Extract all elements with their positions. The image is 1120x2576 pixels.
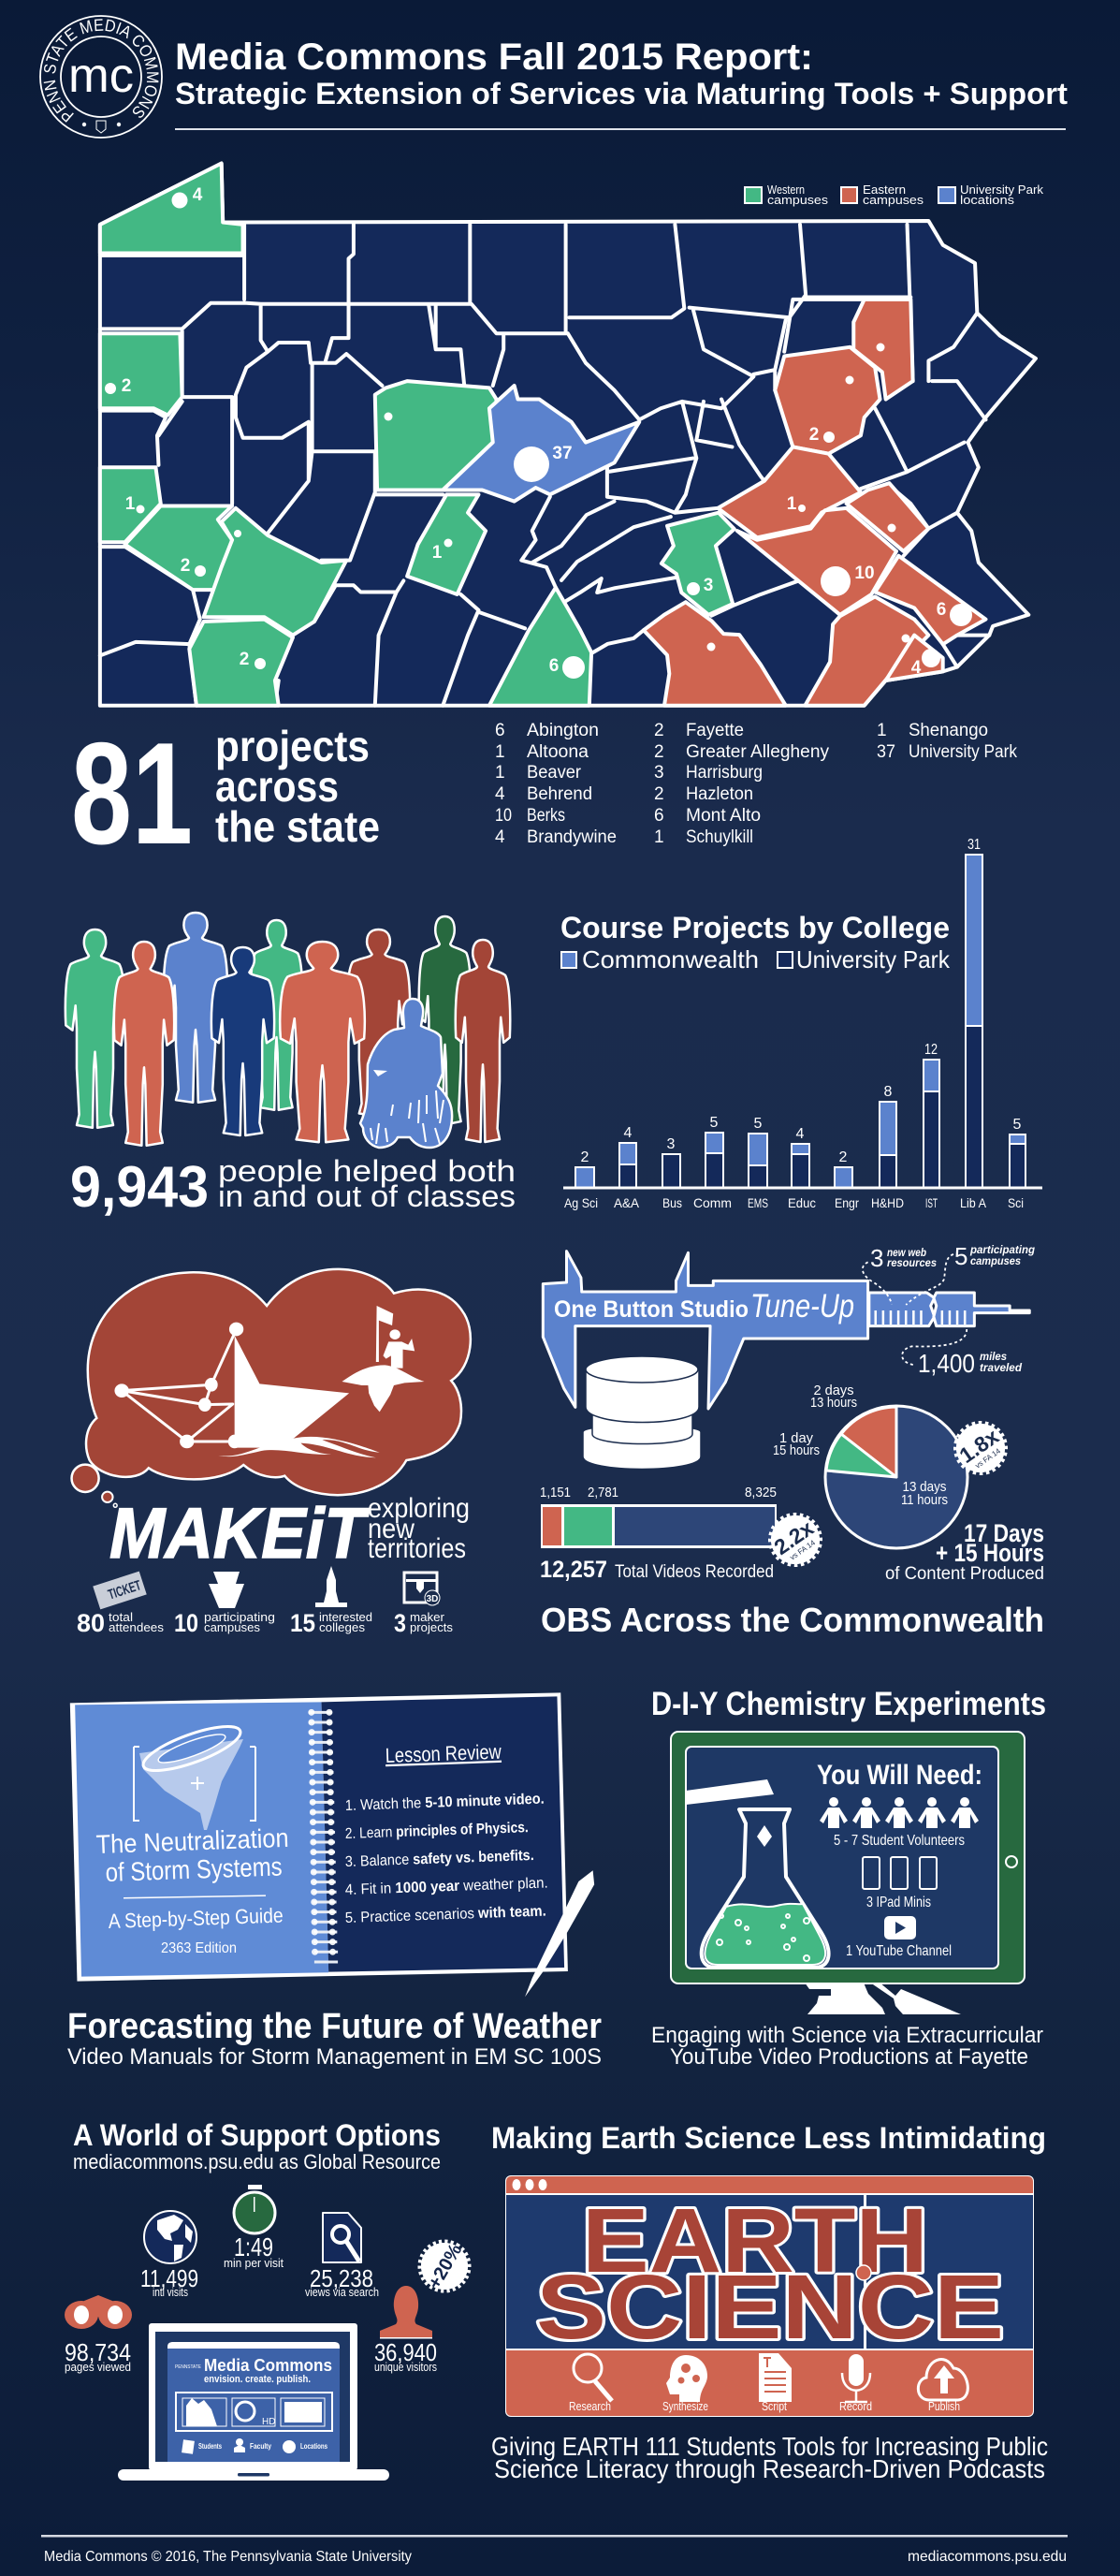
stat: unique visitors: 36,940: [374, 2338, 437, 2366]
subheading: mediacommons.psu.edu as Global Resource: [73, 2150, 441, 2174]
college axis labels: A&A: [614, 1195, 640, 1210]
heading: Forecasting the Future of Weather: [67, 2007, 602, 2046]
bar value labels: 31: [967, 837, 981, 853]
heading: Making Earth Science Less Intimidating: [491, 2121, 1046, 2155]
campus project list: Brandywine: [527, 827, 617, 847]
bar value labels: 5: [1013, 1117, 1022, 1133]
campus project list: Greater Allegheny: [686, 742, 830, 762]
MAKEiT stats: participating: [204, 1610, 275, 1624]
icon: ticket: [93, 1572, 147, 1609]
icon: media stack: [583, 1356, 701, 1470]
people silhouettes: [65, 913, 510, 1148]
bar value labels: 12: [924, 1042, 938, 1058]
lesson review list: [345, 1740, 548, 1926]
panel: OBS across the Commonwealth: Tune-Up: [750, 1288, 854, 1325]
campus markers and counts: 10: [854, 564, 875, 583]
subheading: Video Manuals for Storm Management in EM SC 100S: [67, 2044, 602, 2070]
notebook cover text: of Storm Systems: [105, 1852, 283, 1887]
bar value labels: 4: [624, 1125, 633, 1141]
campus project list: [495, 721, 1017, 847]
campus project list: University Park: [909, 742, 1017, 762]
total videos caption: [540, 1557, 774, 1583]
icon: visitor bust: [380, 2286, 432, 2338]
campus project list: Berks: [527, 806, 565, 826]
icon: flask: [686, 1779, 829, 1968]
campus markers and counts: 2: [240, 650, 249, 669]
campus project list: 37: [877, 742, 895, 762]
laptop showing Media Commons site: envision. create. publish.: [204, 2374, 311, 2385]
tune-up annotations: campuses: [970, 1254, 1021, 1267]
chart legend: Commonwealth: [582, 945, 759, 973]
icon row: research, synthesize, script, record, publish: Research: [569, 2399, 611, 2413]
stat: 81 projects across the state: [71, 712, 380, 874]
tagline: new: [368, 1514, 415, 1544]
content produced caption: + 15 Hours: [936, 1539, 1044, 1567]
content produced caption: [885, 1519, 1044, 1584]
map legend: Eastern: [863, 183, 906, 197]
notebook cover text: [95, 1823, 289, 1956]
title: Media Commons Fall 2015 Report:: [175, 37, 813, 78]
campus markers and counts: 1: [125, 494, 136, 514]
caliper illustration: [543, 1251, 1029, 1409]
notebook cover text: A Step-by-Step Guide: [108, 1903, 284, 1933]
campus markers and counts: 2: [181, 556, 190, 576]
caption: Engaging with Science via Extracurricular: [651, 2023, 1043, 2048]
icon: 3D printer: [404, 1573, 440, 1605]
icon row: research, synthesize, script, record, publish: Publish: [928, 2399, 960, 2413]
laptop showing Media Commons site: Media Commons: [204, 2356, 332, 2375]
bar value labels: 4: [796, 1126, 805, 1142]
caption: [651, 2023, 1043, 2070]
tablet illustration: [671, 1732, 1025, 2014]
footer: Media Commons © 2016, The Pennsylvania State University: [44, 2549, 412, 2565]
stat: pages viewed: 98,734: [65, 2338, 131, 2366]
stat: 9,943 people helped: in and out of classes: [218, 1179, 516, 1213]
badge: +20%: +20%: [424, 2240, 466, 2292]
stat: min per visit: 1:49: [234, 2232, 273, 2261]
college axis labels: [564, 1195, 1024, 1210]
icon: keystone: [209, 1572, 244, 1608]
EARTH SCIENCE wordmark: SCIENCE: [536, 2256, 1004, 2358]
badge: 2.2x vs FA 14: [762, 1506, 829, 1573]
badge: 2.2x vs FA 14: vs FA 14: [789, 1538, 817, 1562]
browser window: Earth Science: [505, 2175, 1034, 2417]
MAKEiT stats: total: [109, 1610, 133, 1624]
you will need list: [817, 1760, 982, 1959]
map legend: University Park: [960, 183, 1044, 197]
campus project list: Fayette: [686, 721, 744, 740]
stat: views via search: 25,238: [310, 2264, 373, 2292]
stat: 81 projects across the state: the state: [215, 802, 380, 851]
stat: unique visitors: unique visitors: [374, 2360, 437, 2374]
county map shapes: [100, 163, 1036, 706]
content produced caption: of Content Produced: [885, 1564, 1044, 1584]
stat: views via search: views via search: [305, 2285, 379, 2299]
campus project list: 2: [654, 721, 664, 740]
lesson review list: Lesson Review: [385, 1740, 502, 1767]
MAKEiT stats: 10: [174, 1609, 198, 1637]
notebook cover text: The Neutralization: [95, 1823, 289, 1859]
logo: Penn State Media Commons seal: PENN STATE MEDIA COMMONS: [43, 19, 159, 123]
icon row: research, synthesize, script, record, publish: [569, 2353, 967, 2413]
icon: tornado: [134, 1718, 255, 1830]
college axis labels: Bus: [662, 1195, 682, 1210]
heading: OBS Across the Commonwealth: [541, 1601, 1044, 1639]
icon: ticket: TICKET: [106, 1577, 143, 1603]
campus project list: 4: [495, 827, 505, 847]
stat: 81 projects across the state: projects: [215, 722, 370, 770]
pie chart: content hours: [773, 1383, 967, 1548]
icon: globe: [144, 2211, 196, 2263]
college axis labels: Educ: [788, 1195, 816, 1210]
tune-up annotations: miles: [980, 1350, 1007, 1363]
campus project list: Beaver: [527, 763, 582, 783]
heading: A World of Support Options: [73, 2118, 441, 2152]
icon: 3D printer: 3D: [427, 1594, 438, 1604]
total videos caption: Total Videos Recorded: [615, 1562, 774, 1582]
MAKEiT wordmark: MAKEiT: [109, 1494, 370, 1573]
bar value labels: 3: [667, 1136, 676, 1152]
badge: 1.8x vs FA 14: 1.8x: [954, 1424, 1003, 1468]
college axis labels: Sci: [1008, 1195, 1024, 1210]
badge: 1.8x vs FA 14: vs FA 14: [974, 1446, 1002, 1471]
campus markers and counts: 1: [432, 543, 443, 563]
campus project list: Harrisburg: [686, 763, 763, 783]
campus project list: 2: [654, 784, 664, 804]
stat: min per visit: [224, 2232, 284, 2270]
college axis labels: Comm: [693, 1195, 732, 1210]
caliper title: One Button Studio: [554, 1296, 749, 1323]
tagline: territories: [368, 1533, 466, 1564]
chart title: Course Projects by College: [560, 911, 950, 944]
stat: 9,943 people helped: 9,943: [70, 1155, 209, 1220]
stacked bar: videos recorded: 8,325: [745, 1485, 777, 1500]
stat: intl visits: 11,499: [140, 2264, 198, 2292]
campus project list: 1: [877, 721, 887, 740]
college axis labels: Lib A: [960, 1195, 987, 1210]
laptop showing Media Commons site: Faculty: [250, 2442, 271, 2451]
laptop showing Media Commons site: HD: [262, 2417, 275, 2427]
icon: binoculars: [65, 2295, 132, 2329]
campus project list: 2: [654, 742, 664, 762]
bar value labels: 5: [710, 1115, 719, 1131]
you will need list: 5 - 7 Student Volunteers: [834, 1833, 965, 1849]
campus markers and counts: 3: [704, 576, 713, 595]
caption: Giving EARTH 111 Students Tools for Increasing Public: [491, 2432, 1048, 2461]
MAKEiT stats: attendees: [109, 1620, 165, 1634]
panel: MAKEiT: [72, 1269, 471, 1637]
tune-up annotations: new web: [887, 1246, 926, 1259]
stat: 81 projects across the state: across: [215, 762, 339, 811]
college axis labels: Engr: [835, 1195, 859, 1210]
campus markers and counts: 4: [193, 185, 203, 205]
tagline: exploring: [368, 1493, 470, 1524]
stat: 9,943 people helped: [70, 1154, 516, 1220]
map legend: [745, 183, 1044, 207]
tagline: [368, 1493, 470, 1564]
heading: D-I-Y Chemistry Experiments: [651, 1686, 1046, 1722]
college axis labels: IST: [925, 1195, 938, 1210]
panel: forecasting the future of weather: [67, 1692, 602, 2070]
campus project list: 4: [495, 784, 505, 804]
MAKEiT stats: [77, 1609, 453, 1637]
stat: pages viewed: pages viewed: [65, 2360, 131, 2374]
icon row: research, synthesize, script, record, publish: Synthesize: [662, 2399, 708, 2413]
lesson review list: 2. Learn principles of Physics.: [345, 1820, 529, 1842]
tune-up annotations: 3: [870, 1244, 883, 1272]
bar value labels: [581, 837, 1022, 1165]
stat: 81 projects across the state: 81: [71, 712, 193, 874]
campus markers and counts: 6: [549, 656, 559, 676]
MAKEiT stats: interested: [319, 1610, 372, 1624]
lesson review list: 1. Watch the 5-10 minute video.: [345, 1792, 545, 1814]
MAKEiT stats: colleges: [319, 1620, 366, 1634]
caption: [491, 2432, 1048, 2483]
notebook cover text: 2363 Edition: [161, 1940, 237, 1956]
person in wheelchair: [360, 999, 452, 1148]
footer: mediacommons.psu.edu: [908, 2549, 1067, 2565]
content produced caption: 17 Days: [964, 1519, 1044, 1547]
stacked bar: videos recorded: 2,781: [588, 1485, 618, 1500]
campus project list: Shenango: [909, 721, 988, 740]
thought cloud with star ship illustration: [72, 1269, 471, 1507]
pie chart: content hours: 15 hours: [773, 1442, 820, 1458]
MAKEiT stats: campuses: [204, 1620, 261, 1634]
MAKEiT stats: 15: [290, 1609, 315, 1637]
pie chart: content hours: 11 hours: [901, 1492, 948, 1508]
campus project list: 6: [495, 721, 505, 740]
pie chart: content hours: 13 days: [902, 1479, 947, 1495]
footer: [41, 2535, 1068, 2565]
college axis labels: EMS: [748, 1195, 768, 1210]
stacked bar: videos recorded: 1,151: [540, 1485, 571, 1500]
laptop showing Media Commons site: [118, 2323, 389, 2481]
lesson review list: 3. Balance safety vs. benefits.: [345, 1848, 534, 1870]
lesson review list: 4. Fit in 1000 year weather plan.: [345, 1875, 548, 1898]
tune-up annotations: 1,400: [918, 1349, 975, 1378]
stat: intl visits: [140, 2264, 198, 2299]
total videos caption: 12,257: [540, 1557, 607, 1583]
panel: a world of support options: [65, 2118, 477, 2481]
icon row: research, synthesize, script, record, publish: Script: [762, 2399, 787, 2413]
bars: [564, 855, 1041, 1189]
campus project list: 1: [495, 763, 505, 783]
pie chart: content hours: 13 hours: [810, 1395, 857, 1411]
tune-up annotations: resources: [887, 1256, 937, 1269]
MAKEiT stats: maker: [410, 1610, 445, 1624]
icon: search document: [323, 2213, 361, 2262]
subtitle: Strategic Extension of Services via Maturing Tools + Support: [175, 77, 1068, 110]
stat: 9,943 people helped: people helped both: [218, 1154, 516, 1188]
tune-up annotations: [870, 1242, 1036, 1378]
campus project list: Hazleton: [686, 784, 753, 804]
campus project list: 10: [495, 806, 512, 826]
pie chart: content hours: 2 days: [814, 1383, 853, 1398]
tune-up annotations: participating: [969, 1243, 1036, 1256]
icon: stopwatch: [234, 2185, 275, 2233]
stacked bar: videos recorded: [540, 1485, 777, 1548]
bar chart: course projects by college: [560, 837, 1041, 1210]
panel: D-I-Y chemistry experiments: [651, 1686, 1046, 2070]
map legend: campuses: [767, 194, 828, 207]
campus project list: Behrend: [527, 784, 592, 804]
map legend: locations: [960, 194, 1014, 207]
campus markers and counts: 2: [122, 376, 131, 396]
panel: OBS across the Commonwealth: [540, 1242, 1044, 1639]
map legend: Western: [767, 183, 805, 197]
bar value labels: 2: [581, 1149, 589, 1165]
lesson review list: 5. Practice scenarios with team.: [345, 1904, 546, 1926]
MAKEiT stats: projects: [410, 1620, 453, 1634]
icon row: research, synthesize, script, record, publish: Record: [839, 2399, 872, 2413]
badge: +20%: [412, 2233, 477, 2299]
EARTH SCIENCE wordmark: [536, 2189, 1004, 2358]
bar value labels: 8: [884, 1084, 893, 1100]
campus markers and counts: [105, 185, 972, 679]
logo: Penn State Media Commons seal: mc: [68, 49, 134, 103]
map legend: campuses: [863, 194, 924, 207]
campus project list: Abington: [527, 721, 599, 740]
college axis labels: H&HD: [871, 1195, 904, 1210]
caption: YouTube Video Productions at Fayette: [670, 2044, 1028, 2070]
notebook: [70, 1692, 594, 1997]
you will need list: 3 IPad Minis: [866, 1895, 931, 1910]
college axis labels: Ag Sci: [564, 1195, 598, 1210]
stat: min per visit: min per visit: [224, 2256, 284, 2270]
you will need list: You Will Need:: [817, 1760, 982, 1791]
bar value labels: 5: [754, 1116, 763, 1132]
campus project list: 1: [654, 827, 664, 847]
campus markers and counts: 6: [937, 600, 946, 620]
pie chart: content hours: 1 day: [779, 1430, 813, 1446]
panel: making earth science less intimidating: [491, 2121, 1048, 2483]
header: logo and title: [39, 15, 1068, 139]
you will need list: 1 YouTube Channel: [846, 1943, 952, 1959]
chart legend: [561, 945, 951, 973]
campus project list: 3: [654, 763, 664, 783]
campus project list: Altoona: [527, 742, 589, 762]
EARTH SCIENCE wordmark: EARTH: [582, 2189, 928, 2291]
campus markers and counts: 4: [911, 658, 922, 678]
laptop showing Media Commons site: Students: [198, 2442, 222, 2451]
campus markers and counts: 2: [809, 425, 819, 445]
badge: 2.2x vs FA 14: 2.2x: [769, 1515, 818, 1559]
map of Pennsylvania campuses: [100, 163, 1044, 706]
campus project list: Schuylkill: [686, 827, 753, 847]
icon: clock tower: [315, 1566, 347, 1607]
tune-up annotations: traveled: [980, 1361, 1023, 1374]
laptop showing Media Commons site: Locations: [300, 2442, 327, 2451]
badge: 1.8x vs FA 14: [947, 1414, 1014, 1482]
campus markers and counts: 37: [552, 444, 573, 463]
MAKEiT stats: 80: [77, 1609, 105, 1637]
tune-up annotations: 5: [954, 1242, 967, 1270]
stat: unique visitors: [374, 2338, 437, 2374]
bar value labels: 2: [839, 1149, 848, 1165]
campus project list: Mont Alto: [686, 806, 761, 826]
caption: Science Literacy through Research-Driven Podcasts: [494, 2454, 1045, 2483]
campus project list: 6: [654, 806, 664, 826]
MAKEiT stats: 3: [394, 1609, 406, 1637]
campus project list: 1: [495, 742, 505, 762]
campus markers and counts: 1: [787, 494, 797, 514]
laptop showing Media Commons site: PENNSTATE: [175, 2364, 202, 2370]
stat: intl visits: intl visits: [153, 2285, 188, 2299]
chart legend: University Park: [796, 945, 951, 973]
